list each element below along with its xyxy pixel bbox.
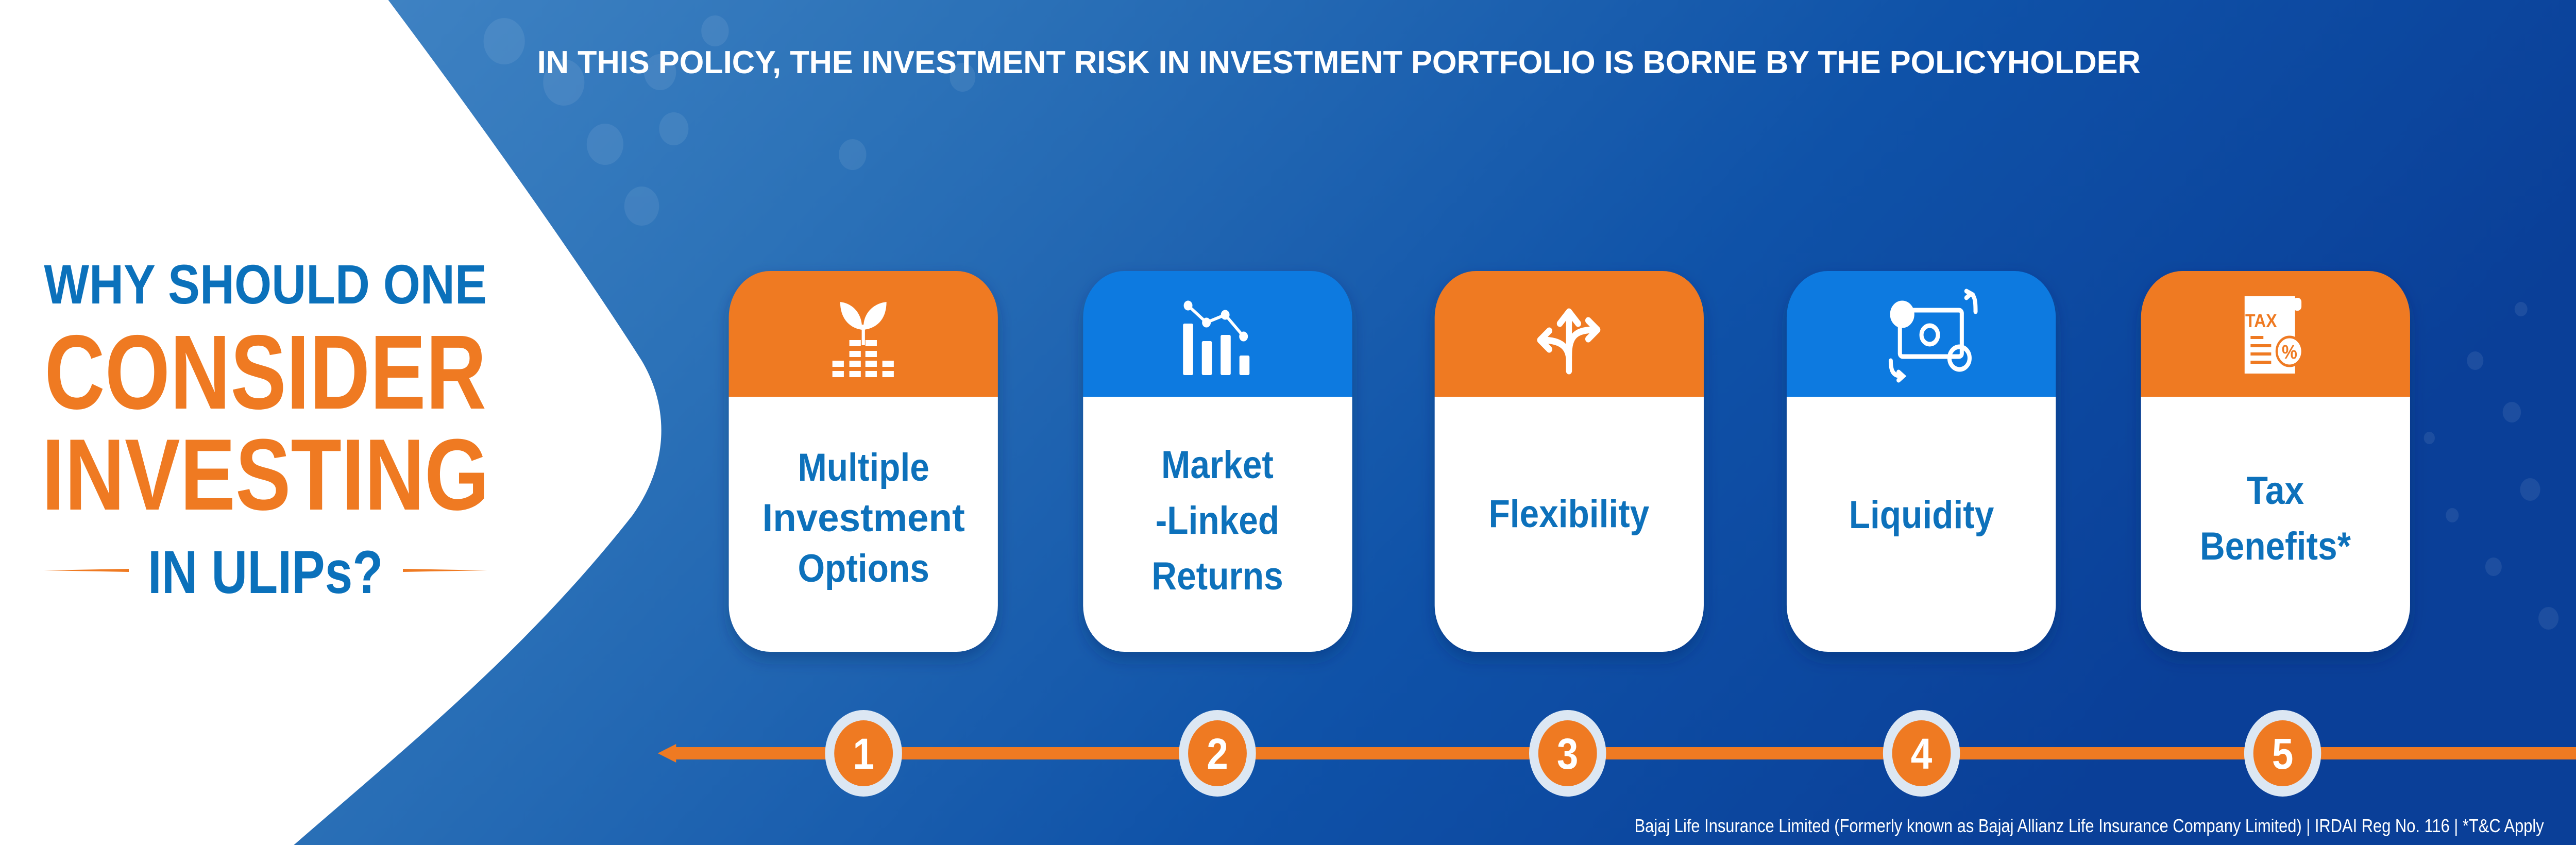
numbered circles: 3 xyxy=(1557,730,1578,778)
numbered circles: 2 xyxy=(1207,730,1228,778)
label xyxy=(762,446,965,590)
icon: money exchange xyxy=(1891,291,1976,380)
white left shape xyxy=(0,0,662,845)
icon: diverging arrows xyxy=(1540,312,1598,371)
footer disclaimer: Bajaj Life Insurance Limited (Formerly known as Bajaj Allianz Life Insurance Company Limited) | IRDAI Reg No. 116 | *T&C Apply xyxy=(1635,816,2544,836)
label: Tax xyxy=(2247,469,2304,513)
icon: plant with coins xyxy=(833,302,894,377)
title: WHY SHOULD ONE xyxy=(44,253,487,315)
title: IN ULIPs? xyxy=(148,538,383,606)
title xyxy=(42,253,489,606)
label xyxy=(2200,469,2351,568)
label: Multiple xyxy=(798,446,929,489)
title: CONSIDER xyxy=(44,313,486,431)
numbered circles: 1 xyxy=(853,730,874,778)
numbered circles: 5 xyxy=(2272,730,2293,778)
icon: tax document xyxy=(2245,296,2302,374)
top disclaimer heading: IN THIS POLICY, THE INVESTMENT RISK IN INVESTMENT PORTFOLIO IS BORNE BY THE POLICYHOLDER xyxy=(537,45,2141,80)
label: Market xyxy=(1161,443,1274,487)
numbered circles xyxy=(825,710,2321,797)
card 3: Flexibility xyxy=(1435,271,1704,652)
label: Investment xyxy=(762,496,965,540)
card 1: Multiple Investment Options xyxy=(729,271,998,652)
card 2: Market-Linked Returns xyxy=(1083,271,1352,652)
card 5: Tax Benefits xyxy=(2141,271,2410,652)
title: INVESTING xyxy=(42,417,489,531)
numbered circles: 4 xyxy=(1911,730,1932,778)
label xyxy=(1151,443,1283,598)
card 4: Liquidity xyxy=(1787,271,2056,652)
icon: bar chart with trend xyxy=(1183,301,1249,375)
label: Benefits* xyxy=(2200,525,2351,568)
icon: tax document: % xyxy=(2282,341,2297,363)
label: Flexibility xyxy=(1488,492,1649,536)
label: Liquidity xyxy=(1849,493,1994,537)
timeline line with arrow xyxy=(658,744,2576,763)
label: Returns xyxy=(1151,554,1283,598)
label: Options xyxy=(798,547,929,590)
label: -Linked xyxy=(1156,499,1279,543)
icon: tax document: TAX xyxy=(2245,311,2277,331)
